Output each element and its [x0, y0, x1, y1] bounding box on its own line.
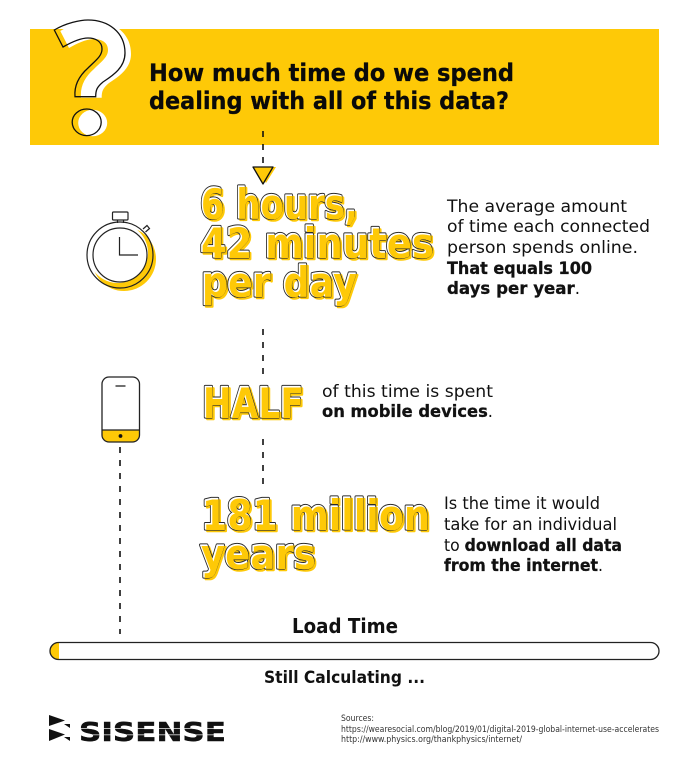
label: load time: Load Time	[292, 614, 398, 638]
title: dealing with all of this data?	[149, 87, 509, 115]
icon: stopwatch	[87, 212, 156, 291]
stat: 6 hours, 42 minutes per day: per day	[201, 257, 356, 306]
stat: 181 million years: 181 million	[201, 490, 429, 539]
label: still calculating: Still Calculating ...	[264, 668, 425, 688]
text: download description	[444, 494, 622, 576]
connector: phone to load bar	[119, 447, 121, 634]
stat: 6 hours, 42 minutes per day: 6 hours,	[202, 181, 359, 230]
sources: http://www.physics.org/thankphysics/internet/	[341, 735, 522, 745]
text: download description: take for an individual	[444, 515, 617, 535]
stat: 6 hours, 42 minutes per day: 42 minutes	[200, 218, 433, 267]
stat: 6 hours, 42 minutes per day: per day	[201, 257, 356, 306]
icon: phone	[102, 377, 140, 442]
text: average time online	[446, 197, 650, 299]
stat: 6 hours, 42 minutes per day: per day	[202, 258, 357, 307]
text: half description	[322, 382, 493, 422]
stat: 181 million years: 181 million	[203, 492, 431, 541]
text: average time online: of time each connected	[447, 217, 650, 237]
sources: Sources:	[341, 714, 374, 724]
text: download description: from the internet.	[444, 556, 603, 576]
stat: 181 million years: 181 million	[202, 491, 430, 540]
text: half description: on mobile devices.	[322, 402, 493, 422]
stat: 181 million years	[200, 490, 431, 580]
stat: half: HALF	[202, 378, 303, 427]
logo: Sisense: SISENSE	[79, 718, 226, 748]
stat: half: HALF	[202, 378, 303, 427]
stat: half: HALF	[203, 379, 304, 428]
arrow: header to first stat	[253, 131, 276, 184]
text: download description: to download all data	[444, 536, 622, 556]
stat: 6 hours, 42 minutes per day: 42 minutes	[200, 218, 433, 267]
stat: 181 million years: years	[201, 530, 316, 579]
stat: 6 hours, 42 minutes per day	[200, 179, 435, 308]
logo: Sisense	[49, 715, 226, 748]
connector: second to third stat	[262, 439, 264, 486]
stat: 6 hours, 42 minutes per day: 6 hours,	[201, 180, 358, 229]
stat: 6 hours, 42 minutes per day: 42 minutes	[202, 220, 435, 269]
stat: 6 hours, 42 minutes per day: per day	[203, 259, 358, 308]
title	[149, 59, 514, 115]
title: How much time do we spend	[149, 59, 514, 87]
header band	[30, 29, 659, 145]
connector: first to second stat	[262, 329, 264, 376]
stat: 181 million years: years	[200, 529, 315, 578]
icon: question mark	[54, 20, 131, 136]
text: average time online: person spends online.	[447, 238, 638, 258]
sources	[341, 714, 660, 745]
stat: 181 million years: years	[200, 529, 315, 578]
stat: 6 hours, 42 minutes per day: 42 minutes	[201, 219, 434, 268]
text: download description: Is the time it would	[444, 494, 600, 514]
stat: half: HALF	[204, 380, 305, 429]
sources: https://wearesocial.com/blog/2019/01/digital-2019-global-internet-use-accelerates	[341, 725, 660, 735]
stat: 181 million years: years	[202, 531, 317, 580]
stat: 181 million years: 181 million	[201, 490, 429, 539]
text: average time online: days per year.	[447, 279, 580, 299]
stat: 6 hours, 42 minutes per day: 6 hours,	[200, 179, 357, 228]
text: average time online: The average amount	[446, 197, 627, 217]
load bar	[50, 642, 659, 660]
text: average time online: That equals 100	[447, 259, 592, 279]
stat: 6 hours, 42 minutes per day: 6 hours,	[200, 179, 357, 228]
text: half description: of this time is spent	[322, 382, 493, 402]
